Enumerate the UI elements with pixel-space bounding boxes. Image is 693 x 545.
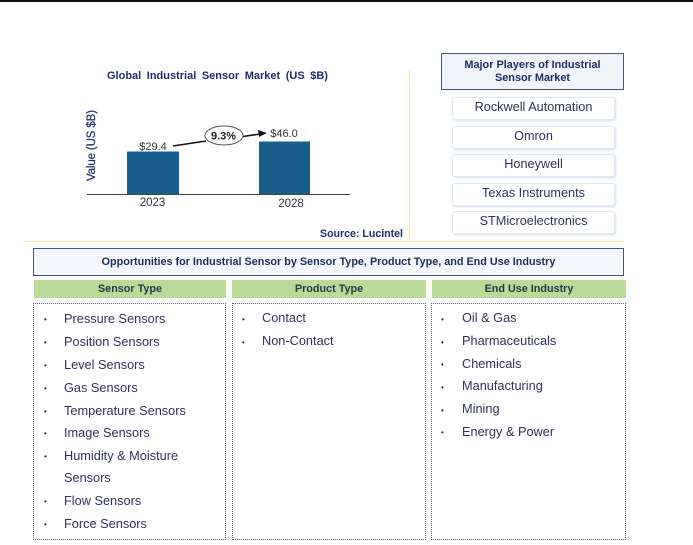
list: sensor types: • bbox=[44, 338, 47, 347]
player: Omron: Omron bbox=[514, 129, 553, 143]
player: Texas Instruments bbox=[452, 183, 615, 206]
player: Rockwell Automation bbox=[452, 97, 615, 120]
x axis: 2028 bbox=[278, 198, 304, 210]
player: Honeywell bbox=[452, 154, 615, 177]
list: sensor types: • bbox=[44, 497, 47, 506]
column header: Sensor Type: Sensor Type bbox=[98, 283, 162, 295]
column header: End Use Industry: End Use Industry bbox=[485, 283, 573, 295]
list: sensor types: • bbox=[44, 361, 47, 370]
player: STMicroelectronics: STMicroelectronics bbox=[480, 214, 587, 228]
bar 2023: $29.4 bbox=[139, 141, 167, 153]
list: end use industries: Oil & Gas bbox=[462, 310, 517, 325]
list: end use industries: • bbox=[441, 428, 444, 437]
list: sensor types: • bbox=[44, 315, 47, 324]
column header: Product Type bbox=[232, 280, 426, 298]
player: Rockwell Automation: Rockwell Automation bbox=[475, 100, 592, 114]
list: sensor types bbox=[33, 303, 226, 540]
list: end use industries: Manufacturing bbox=[462, 378, 543, 393]
list: end use industries: Pharmaceuticals bbox=[462, 333, 556, 348]
CAGR ellipse: 9.3% bbox=[211, 130, 236, 142]
list: end use industries: Energy & Power bbox=[462, 424, 554, 439]
bar chart bbox=[86, 110, 350, 210]
list: sensor types: • bbox=[44, 452, 47, 461]
list: sensor types: Temperature Sensors bbox=[64, 403, 186, 418]
y axis label: Value (US $B) bbox=[86, 110, 98, 181]
list: sensor types: Force Sensors bbox=[64, 516, 147, 531]
player: Honeywell: Honeywell bbox=[504, 157, 563, 171]
list: end use industries: Mining bbox=[462, 401, 500, 416]
list: sensor types: Flow Sensors bbox=[64, 493, 141, 508]
list: end use industries: • bbox=[441, 338, 444, 347]
list: sensor types: Pressure Sensors bbox=[64, 311, 165, 326]
list: sensor types: Humidity & Moisture bbox=[64, 448, 178, 463]
list: product types bbox=[232, 303, 426, 540]
list: sensor types: Sensors bbox=[64, 470, 111, 485]
panel: major players bbox=[441, 53, 624, 236]
major players heading: Sensor Market bbox=[495, 72, 570, 84]
list: end use industries: • bbox=[441, 383, 444, 392]
list: sensor types: Position Sensors bbox=[64, 334, 160, 349]
list: product types: Non-Contact bbox=[262, 333, 334, 348]
top black edge bar bbox=[0, 0, 693, 2]
column header: Sensor Type bbox=[34, 280, 226, 298]
list: end use industries: • bbox=[441, 360, 444, 369]
list: sensor types: Level Sensors bbox=[64, 357, 145, 372]
column header: End Use Industry bbox=[432, 280, 626, 298]
chart title: Global Industrial Sensor Market (US $B) bbox=[107, 70, 328, 82]
list: sensor types: Image Sensors bbox=[64, 425, 150, 440]
list: sensor types: • bbox=[44, 520, 47, 529]
bar 2023 bbox=[127, 141, 179, 194]
player: Texas Instruments: Texas Instruments bbox=[482, 186, 585, 200]
growth arrow bbox=[173, 130, 267, 146]
list: product types: • bbox=[242, 315, 245, 324]
opportunities heading bbox=[33, 248, 624, 276]
x axis bbox=[87, 194, 350, 210]
column header: Product Type: Product Type bbox=[295, 283, 363, 295]
bar 2028 bbox=[259, 128, 310, 194]
list: sensor types: • bbox=[44, 407, 47, 416]
list: end use industries: • bbox=[441, 315, 444, 324]
list: sensor types: Gas Sensors bbox=[64, 380, 138, 395]
CAGR ellipse bbox=[205, 126, 243, 145]
list: end use industries: Chemicals bbox=[462, 356, 522, 371]
major players heading: Major Players of Industrial bbox=[464, 59, 601, 71]
list: product types: Contact bbox=[262, 310, 306, 325]
list: end use industries bbox=[431, 303, 626, 540]
opportunities heading: Opportunities for Industrial Sensor by Sensor Type, Product Type, and End Use Industry bbox=[102, 256, 555, 268]
bar 2028: $46.0 bbox=[270, 128, 298, 140]
source note: Source: Lucintel bbox=[320, 228, 403, 240]
list: product types: • bbox=[242, 338, 245, 347]
list: end use industries: • bbox=[441, 406, 444, 415]
list: sensor types: • bbox=[44, 384, 47, 393]
major players heading bbox=[441, 53, 624, 90]
player: STMicroelectronics bbox=[452, 211, 615, 234]
list: sensor types: • bbox=[44, 429, 47, 438]
x axis: 2023 bbox=[140, 197, 165, 209]
vertical yellow divider bbox=[409, 70, 410, 240]
horizontal yellow divider bbox=[25, 241, 624, 242]
player: Omron bbox=[452, 126, 615, 149]
